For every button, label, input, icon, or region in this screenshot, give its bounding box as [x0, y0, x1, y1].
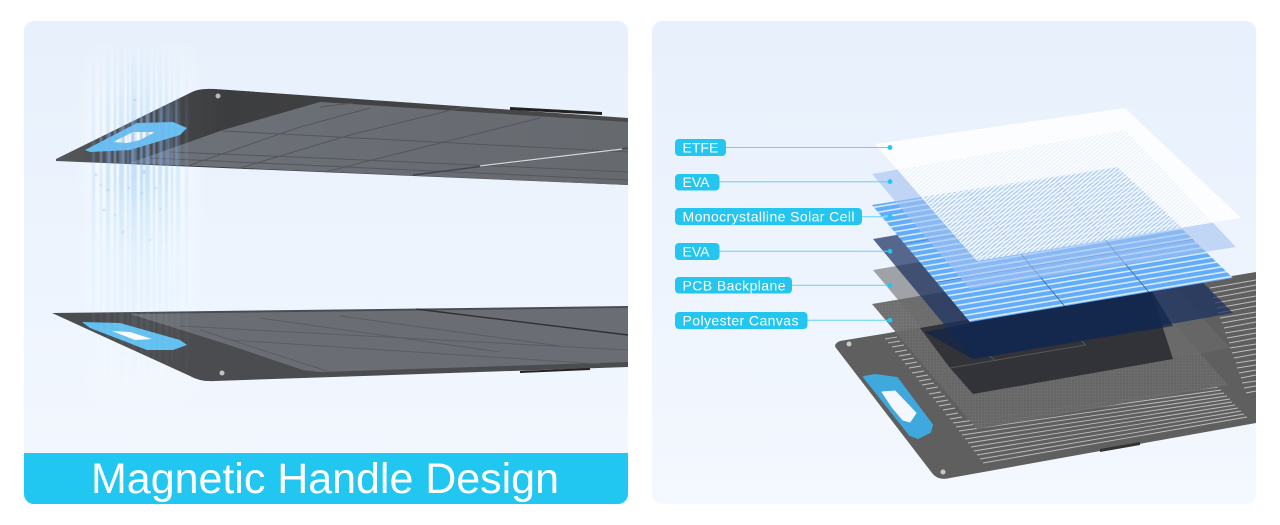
callout: PCB Backplane [675, 277, 892, 294]
callout: Polyester Canvas [675, 312, 892, 329]
banner [24, 453, 628, 504]
layer: EVA upper [872, 130, 1236, 289]
heading: Magnetic Handle Design [91, 455, 559, 503]
callout: EVA second: EVA [682, 244, 710, 260]
water light beam [92, 59, 188, 354]
blue handle plate [864, 375, 932, 438]
callout: PCB Backplane: PCB Backplane [682, 278, 786, 294]
callout: Monocrystalline Solar Cell: Monocrystalline Solar Cell [682, 208, 854, 224]
layer: ETFE [875, 108, 1241, 261]
callout: EVA: EVA [682, 174, 710, 190]
upper solar panel [56, 89, 628, 185]
layer: monocrystalline solar cell [872, 168, 1233, 322]
callout: ETFE [675, 139, 892, 156]
water light glow [96, 114, 182, 168]
layer: PCB backplane [873, 262, 1173, 394]
callout: EVA [675, 174, 892, 190]
layer: EVA lower [873, 234, 1233, 359]
lower solar panel [52, 306, 628, 381]
callout: EVA second [675, 243, 892, 260]
layer: polyester canvas [872, 292, 1228, 429]
panel: layer structure [652, 21, 1269, 504]
blue handle [85, 122, 187, 152]
blue handle [82, 322, 187, 350]
callout: Polyester Canvas: Polyester Canvas [682, 312, 798, 328]
callout: ETFE: ETFE [682, 140, 718, 156]
panel: magnetic handle [24, 21, 628, 504]
base panel [835, 272, 1256, 479]
